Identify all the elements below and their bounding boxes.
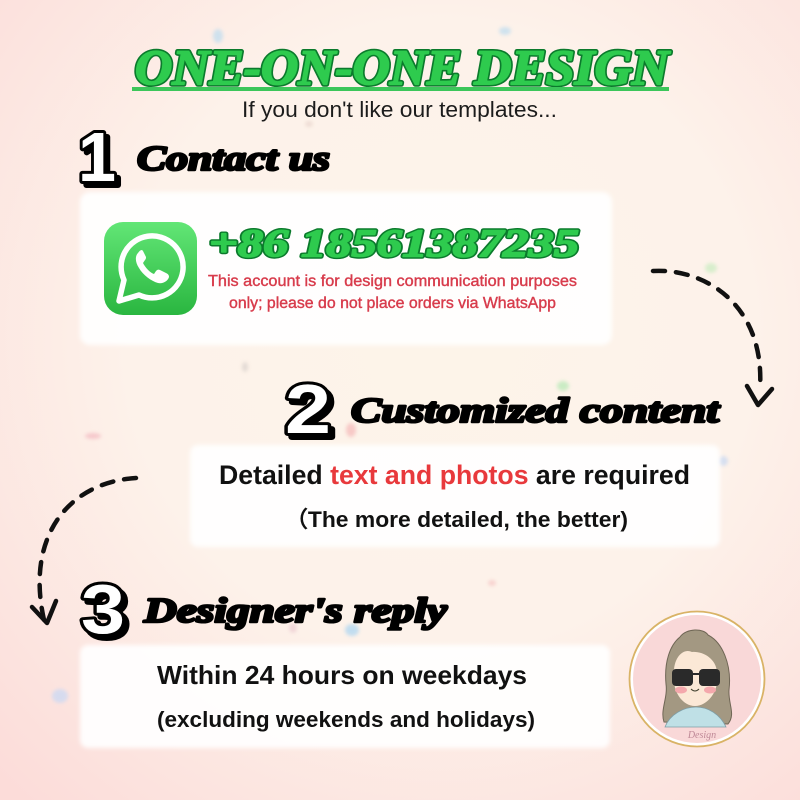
reply exclusion: (excluding weekends and holidays) <box>157 707 535 732</box>
sunglasses <box>672 669 720 686</box>
phone number: +86 18561387235 <box>209 222 579 265</box>
heading: contact us: Contact us <box>137 139 330 178</box>
reply time: Within 24 hours on weekdays <box>157 660 527 690</box>
title: ONE-ON-ONE DESIGN <box>135 39 671 95</box>
face <box>674 651 717 706</box>
subtitle: If you don't like our templates... <box>242 97 557 122</box>
number 1: 1 <box>82 122 120 200</box>
arrow: step 1 to 2 <box>653 271 772 405</box>
hoodie <box>665 707 726 727</box>
requirement text: Detailed text and photos are required <box>219 460 690 490</box>
requirement note: （The more detailed, the better) <box>285 507 628 532</box>
number 3: 3 <box>85 574 129 652</box>
title: ONE-ON-ONE DESIGN <box>135 39 671 95</box>
hair <box>663 630 732 724</box>
number 1: 1 <box>78 118 116 196</box>
icon: whatsapp <box>104 222 197 315</box>
panel: contact <box>80 192 612 345</box>
signature: Design <box>687 730 716 741</box>
number 2: 2 <box>289 374 335 452</box>
notice text: only; please do not place orders via WhatsApp <box>229 295 556 312</box>
heading: customized content: Customized content <box>351 391 721 430</box>
step 2 heading <box>285 370 721 452</box>
avatar <box>630 612 764 746</box>
cheeks and mouth <box>675 686 716 694</box>
notice text <box>208 273 577 312</box>
arrow: step 2 to 3 <box>32 478 136 623</box>
heading: designer's reply: Designer's reply <box>143 591 448 630</box>
step 1 heading <box>78 118 330 200</box>
number 2: 2 <box>285 370 331 448</box>
panel: reply <box>80 645 610 748</box>
panel: content <box>190 445 720 547</box>
notice text: This account is for design communication purposes <box>208 273 577 290</box>
number 3: 3 <box>81 570 125 648</box>
phone number: +86 18561387235 <box>209 222 579 265</box>
step 3 heading <box>81 570 448 652</box>
